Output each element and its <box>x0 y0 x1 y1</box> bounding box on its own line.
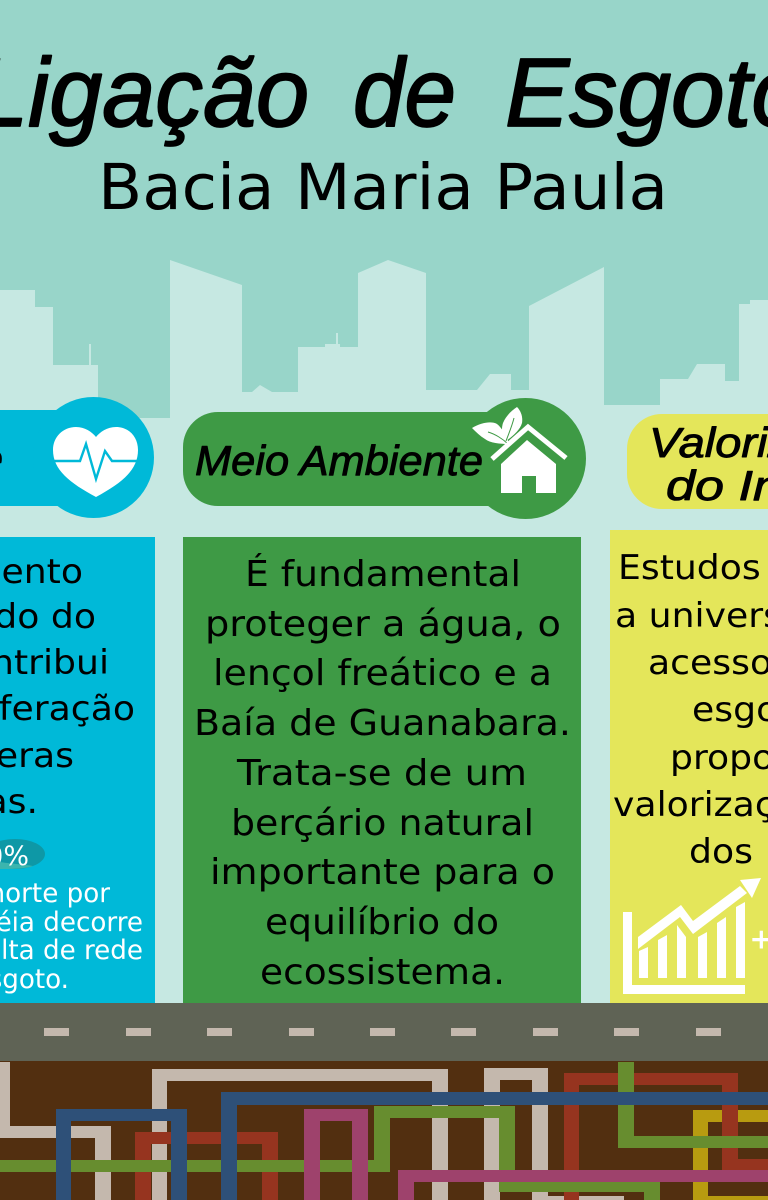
meio ambiente body text: É fundamental <box>245 553 521 595</box>
icon: heart with pulse <box>53 427 139 497</box>
underground soil with pipes <box>0 1061 768 1200</box>
red pipes <box>135 1073 768 1200</box>
blue pipes <box>56 1092 768 1200</box>
panel: saúde <box>0 397 155 1003</box>
meio ambiente body text: equilíbrio do <box>265 902 499 943</box>
subtitle: Bacia Maria Paula <box>98 151 668 224</box>
meio ambiente body text: Baía de Guanabara. <box>194 703 571 744</box>
saúde statistic text <box>0 878 143 995</box>
valorização heading badge <box>627 414 768 509</box>
panel: valorização do imóvel <box>610 414 768 1003</box>
pink pipes <box>304 1109 768 1200</box>
city skyline <box>0 260 768 1003</box>
meio ambiente body text: Trata-se de um <box>236 753 527 794</box>
title: de <box>353 38 456 147</box>
valorização body text <box>613 549 768 872</box>
yellow pipes <box>693 1110 768 1200</box>
green pipes <box>0 1062 768 1200</box>
meio ambiente body card <box>183 537 581 1003</box>
saúde heading badge <box>0 397 154 518</box>
valorização body card <box>610 530 768 1003</box>
meio ambiente heading badge <box>183 398 586 519</box>
saúde body text <box>0 553 135 822</box>
meio ambiente body text: lençol freático e a <box>213 653 552 694</box>
meio ambiente body text: ecossistema. <box>260 952 505 993</box>
beige pipes <box>0 1062 624 1200</box>
road <box>0 1003 768 1061</box>
meio ambiente heading badge: Meio Ambiente <box>195 437 483 484</box>
meio ambiente body text <box>194 553 571 993</box>
icon: house with leaves <box>472 407 566 493</box>
saúde body card <box>0 537 155 1003</box>
percentage badge <box>0 839 45 872</box>
icon: rising bar chart <box>623 878 761 994</box>
panel: meio ambiente <box>183 398 586 1003</box>
meio ambiente body text: importante para o <box>210 852 555 893</box>
meio ambiente body text: berçário natural <box>231 803 534 844</box>
meio ambiente body text: proteger a água, o <box>205 604 561 645</box>
title <box>0 38 768 147</box>
